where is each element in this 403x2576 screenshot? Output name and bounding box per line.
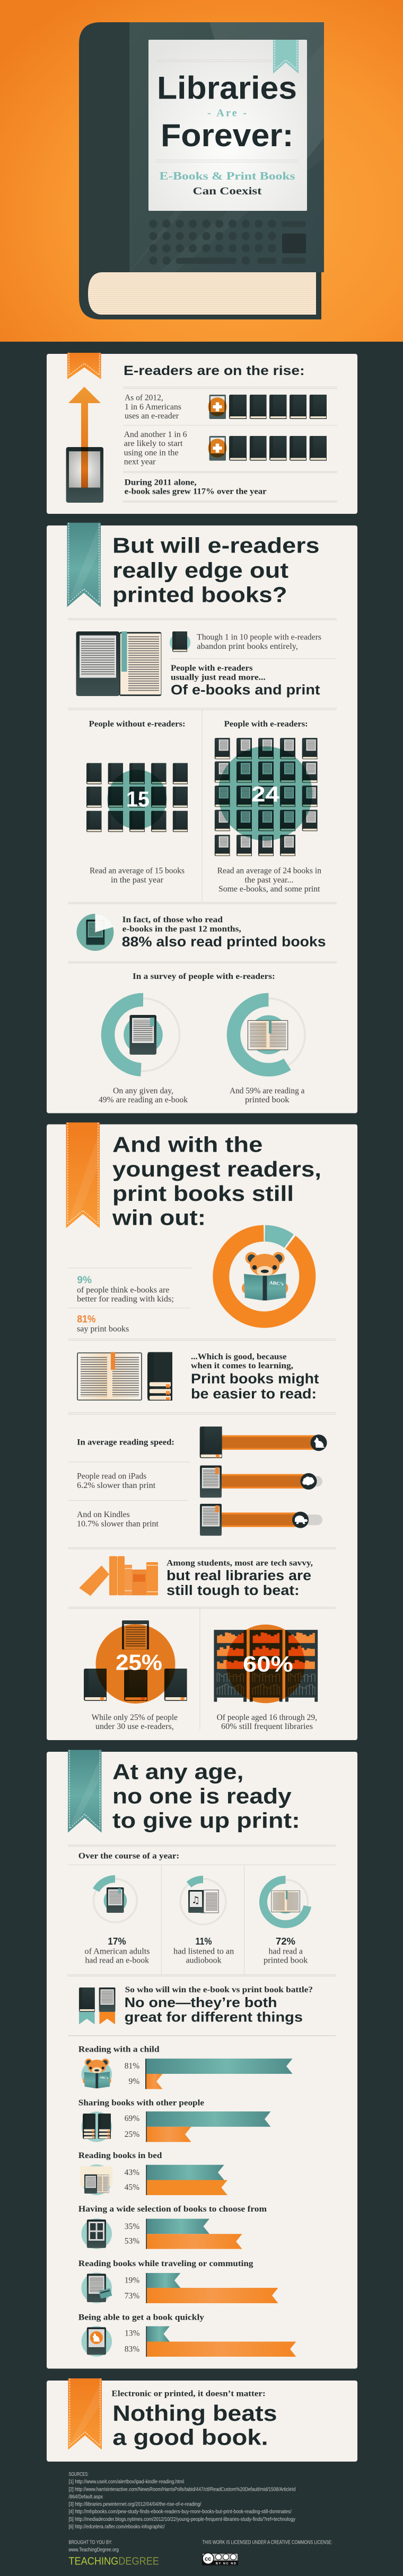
heading: E-readers are on the rise: [124,363,304,378]
text: another 1 in 6: And another 1 in 6 [124,430,187,439]
icon: reader with rabbit [82,2326,112,2357]
text: 1 in 6 Americans: 1 in 6 Americans [125,403,181,412]
icon: 88% pie with reader [76,914,113,951]
stat: 81%: say print books [77,1324,129,1333]
stat: 9% [77,1275,174,1304]
bars: 81% vs 9% [125,2058,293,2089]
row: sharing books [78,2099,270,2142]
heading [112,533,319,607]
text: 59%: And 59% are reading a [230,1086,305,1095]
chart: 11% audiobook [180,1878,226,1925]
text: abandon print [197,632,321,651]
text: 88% also read printed books [122,915,326,949]
stat: 72% [264,1936,308,1965]
illustration: open book with orange ribbon [77,1352,142,1400]
text: 117% growth: e-book sales grew 117% over the year [125,487,267,496]
closing statement: Nothing beats [112,2401,277,2426]
credit: teaching degree [68,2539,159,2567]
badge: creative commons [202,2553,238,2565]
icon: bookmark on screen [273,40,299,74]
column: people without e-readers: Read an average of 15 books [90,867,185,875]
text: 117% growth: During 2011 alone, [125,478,197,487]
heading [112,1760,300,1832]
stat: 9%: better for reading with kids; [77,1295,174,1304]
sources list: /864/Default.aspx [68,2493,103,2500]
bars: 19% vs 73%: 73% [125,2292,139,2301]
stat: 72%: printed book [264,1956,308,1965]
stat: 17%: had read an e-book [85,1956,149,1965]
figure: 25% use e-readers: 25% [116,1650,162,1675]
sources list: [3] http://libraries.pewinternet.org/2012/04/04/the-rise-of-e-reading/ [68,2501,202,2508]
heading [112,1133,321,1230]
bars: 69% vs 25% [125,2111,270,2142]
pictogram: 24 books: 24 [251,782,279,806]
chart: 72% printed [263,1879,309,1925]
sources list [68,2471,296,2530]
credit: teaching degree: www.TeachingDegree.org [68,2546,119,2553]
heading: And with the [112,1133,262,1157]
text: easier to read [191,1352,319,1402]
stat: 81% [77,1314,129,1333]
title: Forever: [161,118,294,153]
bars: 69% vs 25%: 25% [125,2130,139,2139]
bar: iPad speed [200,1465,322,1498]
column: people with e-readers: the past year... [245,876,294,885]
text: read more: usually just read more... [171,673,266,682]
bars: 43% vs 45%: 45% [125,2183,139,2192]
text: who will win: No one—they’re both [125,1994,277,2010]
text: 88% also read printed books: 88% also read printed books [122,934,326,949]
text: libraries tough to beat [167,1558,313,1598]
bars: 13% vs 83% [125,2327,296,2357]
sources list: [2] http://www.harrisinteractive.com/NewsRoom/HarrisPolls/tabid/447/ctl/ReadCustom%20Default/mid/1508/ArticleId [68,2486,296,2492]
row: wide selection: Having a wide selection of books to choose from [78,2205,267,2214]
row: traveling or commuting [78,2259,278,2303]
text: 59%: printed book [245,1095,290,1104]
row: reading with a child [78,2045,293,2089]
stat: 11%: 11% [195,1936,212,1947]
text: 25%: While only 25% of people [92,1713,178,1722]
stat: 11%: had listened to an [173,1947,234,1956]
stat: 72%: 72% [276,1936,295,1947]
text: 88% also read printed books: e-books in the past 12 months, [122,924,241,933]
icon: teddy bear reading [242,1252,288,1300]
title [157,70,297,197]
badge: creative commons: BY NC ND [216,2562,236,2565]
sources list: [6] http://edcetera.rafter.com/ebooks-infographic/ [68,2524,165,2530]
heading: no one is ready [112,1784,292,1808]
stat: 9%: 9% [77,1275,92,1286]
text: another 1 in 6 [124,430,187,466]
column: people with e-readers: Some e-books, and some print [218,885,320,894]
heading: But will e-readers [112,533,319,558]
chart: 17% e-book [93,1878,137,1923]
closing statement: Electronic or printed, it doesn’t matter: [111,2389,266,2399]
stat: 72%: had read a [268,1947,303,1956]
text: 1 in 6 Americans: uses an e-reader [125,412,179,421]
bar: print speed [200,1427,327,1458]
bars: 69% vs 25%: 69% [125,2114,139,2123]
subheading: survey: In a survey of people with e-readers: [133,972,275,981]
bars: 35% vs 53%: 35% [125,2222,139,2231]
pictogram: 1 of 6 e-reader [208,395,327,419]
chart: 49% reading an e-book [106,998,180,1072]
header band [0,0,403,342]
text: 49% [99,1086,188,1104]
text: 60% [217,1713,317,1731]
text: Kindles: And on Kindles [77,1510,130,1519]
icon: orange ribbon [68,2378,102,2450]
bars: 43% vs 45% [125,2165,227,2195]
panel: no one is ready to give up print [47,1750,357,2369]
sources list: SOURCES: [68,2471,89,2477]
row: reading with a child: Reading with a child [78,2045,160,2054]
stat: 81%: 81% [77,1314,95,1325]
icon: orange ribbon [67,353,101,379]
text: easier to read: when it comes to learning, [191,1361,293,1370]
text: another 1 in 6: are likely to start [124,439,183,448]
text: read more: People with e-readers [171,664,252,673]
bars: 35% vs 53%: 53% [125,2237,139,2246]
closing statement: a good book. [112,2425,268,2450]
bars: 19% vs 73%: 19% [125,2276,139,2285]
text: another 1 in 6: using one in the [124,448,179,457]
license [202,2539,332,2565]
text: easier to read: ...Which is good, because [191,1352,287,1361]
chart: kids donut [221,1233,308,1320]
text: libraries tough to beat: still tough to beat: [167,1583,300,1598]
text: easier to read: be easier to read: [191,1387,317,1402]
illustration: book / e-reader cover [79,22,324,319]
row: wide selection [78,2205,267,2249]
heading: youngest readers, [112,1157,321,1181]
illustration: stack of orange books [79,1556,158,1596]
column: people with e-readers: People with e-readers: [224,720,308,729]
bar: Kindle speed [200,1504,322,1536]
heading: print books still [112,1181,294,1206]
text: abandon print: abandon print books entirely, [197,642,298,651]
heading: really edge out [112,558,288,582]
sources list: [1] http://www.useit.com/alertbox/ipad-kindle-reading.html [68,2479,184,2485]
text: iPads [77,1472,156,1490]
column: people with e-readers [215,720,321,894]
stat: 9%: of people think e-books are [77,1286,170,1295]
sources list: [5] http://mediadecoder.blogs.nytimes.com/2012/10/22/young-people-frequent-libraries-study-finds/?ref=technology [68,2516,296,2522]
bars: 13% vs 83%: 13% [125,2329,140,2338]
panel: will e-readers edge out printed books [47,523,357,1113]
text: read more [171,664,320,698]
text: easier to read: Print books might [191,1371,319,1386]
bars: 81% vs 9%: 81% [125,2062,139,2071]
panel: nothing beats a good book [47,2378,357,2462]
row: reading in bed [78,2151,227,2195]
bars: 35% vs 53% [125,2219,242,2249]
column: people without e-readers: in the past year [111,876,164,885]
stat: 17%: of American adults [85,1947,150,1956]
subheading: over the course of a year: Over the course of a year: [78,1852,179,1861]
stat: 17% [85,1936,150,1965]
column: people without e-readers: People without e-readers: [89,720,186,729]
text: libraries tough to beat: but real libraries are [167,1568,311,1583]
icon: book with oval [170,631,190,652]
icon: e-reader with rising arrow [66,387,103,503]
icon: reader with card [82,2272,112,2303]
title: E-Books & Print Books [159,170,295,182]
text: libraries tough to beat: Among students, most are tech savvy, [167,1558,313,1568]
text: 1 in 6 Americans: As of 2012, [125,394,163,403]
icon: orange ribbon [66,1122,100,1228]
text: 88% also read printed books: In fact, of those who read [122,915,223,924]
text: iPads: 6.2% slower than print [77,1481,156,1490]
text: 49%: 49% are reading an e-book [99,1095,188,1104]
stat: 11% [173,1936,234,1965]
text: who will win [125,1985,313,2025]
license: THIS WORK IS LICENSED UNDER A CREATIVE COMMONS LICENSE: [203,2539,332,2545]
text: iPads: People read on iPads [77,1472,146,1481]
sources list: [4] http://mhpbooks.com/pew-study-finds-ebook-readers-buy-more-books-but-print-book-reading-still-dominates/ [68,2509,292,2515]
text: 49%: On any given day, [113,1086,173,1095]
chart: 11% audiobook: ♫ [191,1895,200,1906]
row: get a book quickly: Being able to get a book quickly [78,2313,204,2322]
bars: 43% vs 45%: 43% [125,2168,139,2177]
text: 117% growth [125,478,267,496]
text: 1 in 6 Americans [125,394,181,421]
figure: 60% frequent libraries: 60% [243,1651,293,1676]
illustration: e-reader beside open book [76,631,161,696]
bars: 81% vs 9%: 9% [129,2077,139,2086]
text: Kindles: 10.7% slower than print [77,1519,159,1529]
pictogram: another 1 of 6 [208,436,327,461]
figure: 60% frequent libraries [214,1625,318,1703]
panel: youngest readers [47,1122,357,1740]
title: - Are - [207,108,247,119]
text: 60%: 60% still frequent libraries [221,1722,313,1731]
credit: teaching degree: TEACHINGDEGREE [68,2555,159,2567]
row: traveling or commuting: Reading books while traveling or commuting [78,2259,253,2268]
heading: to give up print: [112,1808,300,1832]
badge: creative commons: cc [205,2556,211,2562]
text: who will win: great for different things [125,2009,303,2025]
stat: 17%: 17% [108,1936,126,1947]
row: get a book quickly [78,2313,296,2357]
column: people without e-readers [86,720,188,885]
row: reading in bed: Reading books in bed [78,2151,162,2160]
icon: teal ribbon [68,1750,102,1833]
pictogram: 24 books [215,738,318,856]
text: who will win: So who will win the e-book vs print book battle? [125,1985,313,1994]
icon: teal ribbon [67,523,101,607]
pictogram: 15 books [86,763,188,832]
text: average reading speed: In average reading speed: [77,1438,174,1447]
row: sharing books: Sharing books with other people [78,2099,204,2108]
text: 59% [230,1086,305,1104]
figure: 25% use e-readers [84,1620,187,1704]
stat: 11%: audiobook [186,1956,222,1965]
text: abandon print: Though 1 in 10 people with e-readers [197,632,321,642]
chart: 59% reading a printed book [232,998,305,1072]
column: people with e-readers: Read an average of 24 books in [217,867,321,875]
icon: reader with book grid [82,2218,112,2249]
icon: book and e-reader with ribbons [79,1987,116,2025]
text: another 1 in 6: next year [124,458,156,466]
illustration: closed book with markers [147,1352,172,1401]
bars: 19% vs 73% [125,2273,278,2303]
title: Can Coexist [193,185,262,197]
text: 60%: Of people aged 16 through 29, [217,1713,317,1722]
title: Libraries [157,70,297,106]
panel: e-readers are on the rise [47,353,357,514]
text: 25%: under 30 use e-readers, [95,1722,174,1731]
keyboard [149,220,306,264]
text: 25% [92,1713,178,1731]
text: read more: Of e-books and print [171,683,320,698]
icon: two books [82,2111,112,2142]
heading: printed books? [112,582,287,607]
pictogram: 15 books: 15 [126,787,150,812]
text: Kindles [77,1510,159,1529]
icon: teddy bear [82,2058,112,2088]
credit: teaching degree: BROUGHT TO YOU BY: [68,2539,112,2545]
heading: At any age, [112,1760,244,1784]
bars: 13% vs 83%: 83% [125,2345,139,2354]
icon: pillow with reader and book [80,2164,112,2195]
heading: win out: [112,1206,206,1230]
closing statement [111,2389,277,2450]
